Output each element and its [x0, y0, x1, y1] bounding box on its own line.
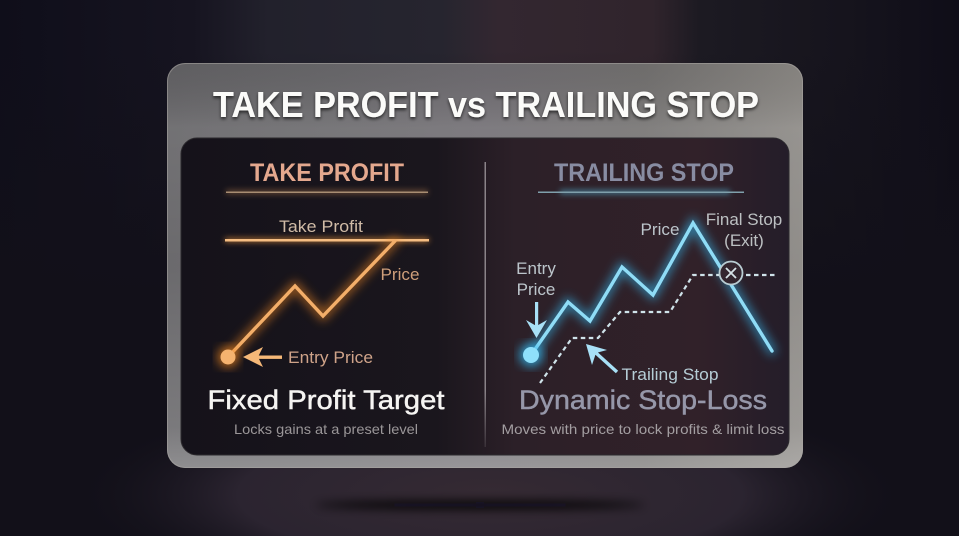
subheading: fixed profit target: Fixed Profit Target: [208, 385, 445, 415]
take profit level line: [225, 238, 429, 242]
arrow: entry price: [243, 347, 282, 367]
subheading: dynamic stop-loss: Dynamic Stop-Loss: [519, 385, 767, 415]
label: final stop: Final Stop: [706, 210, 782, 229]
caption: moves with price: Moves with price to lock profits & limit loss: [502, 421, 784, 437]
label: trailing stop: Trailing Stop: [622, 365, 718, 384]
heading underline: [538, 190, 744, 194]
caption: locks gains: Locks gains at a preset level: [234, 421, 418, 437]
label: price: Price: [640, 220, 680, 239]
panel: trailing stop: [502, 159, 784, 437]
label: entry price: Price: [517, 280, 555, 299]
chart: price line: [228, 241, 395, 357]
label: entry price: Entry Price: [288, 348, 373, 367]
panel: outer metal frame: [167, 63, 803, 468]
entry dot: [519, 343, 543, 367]
chart: price line: [531, 223, 772, 355]
label: take profit line: Take Profit: [279, 217, 363, 236]
heading: trailing stop: TRAILING STOP: [554, 159, 734, 187]
exit marker: [720, 262, 742, 284]
entry dot: [217, 346, 239, 368]
panel: inner dark screen: [181, 138, 789, 455]
title: TAKE PROFIT vs TRAILING STOP: [213, 84, 759, 125]
label: price: Price: [380, 265, 420, 284]
panel: take profit: [208, 159, 445, 437]
arrow: trailing stop: [586, 344, 617, 372]
heading underline: [226, 190, 428, 194]
divider: [484, 162, 486, 447]
label: entry price: Entry: [516, 259, 556, 278]
chart: trailing stop dashed line: [540, 275, 778, 383]
arrow: entry price: [526, 302, 547, 338]
label: final stop: (Exit): [724, 231, 764, 250]
heading: take profit: TAKE PROFIT: [250, 159, 404, 187]
